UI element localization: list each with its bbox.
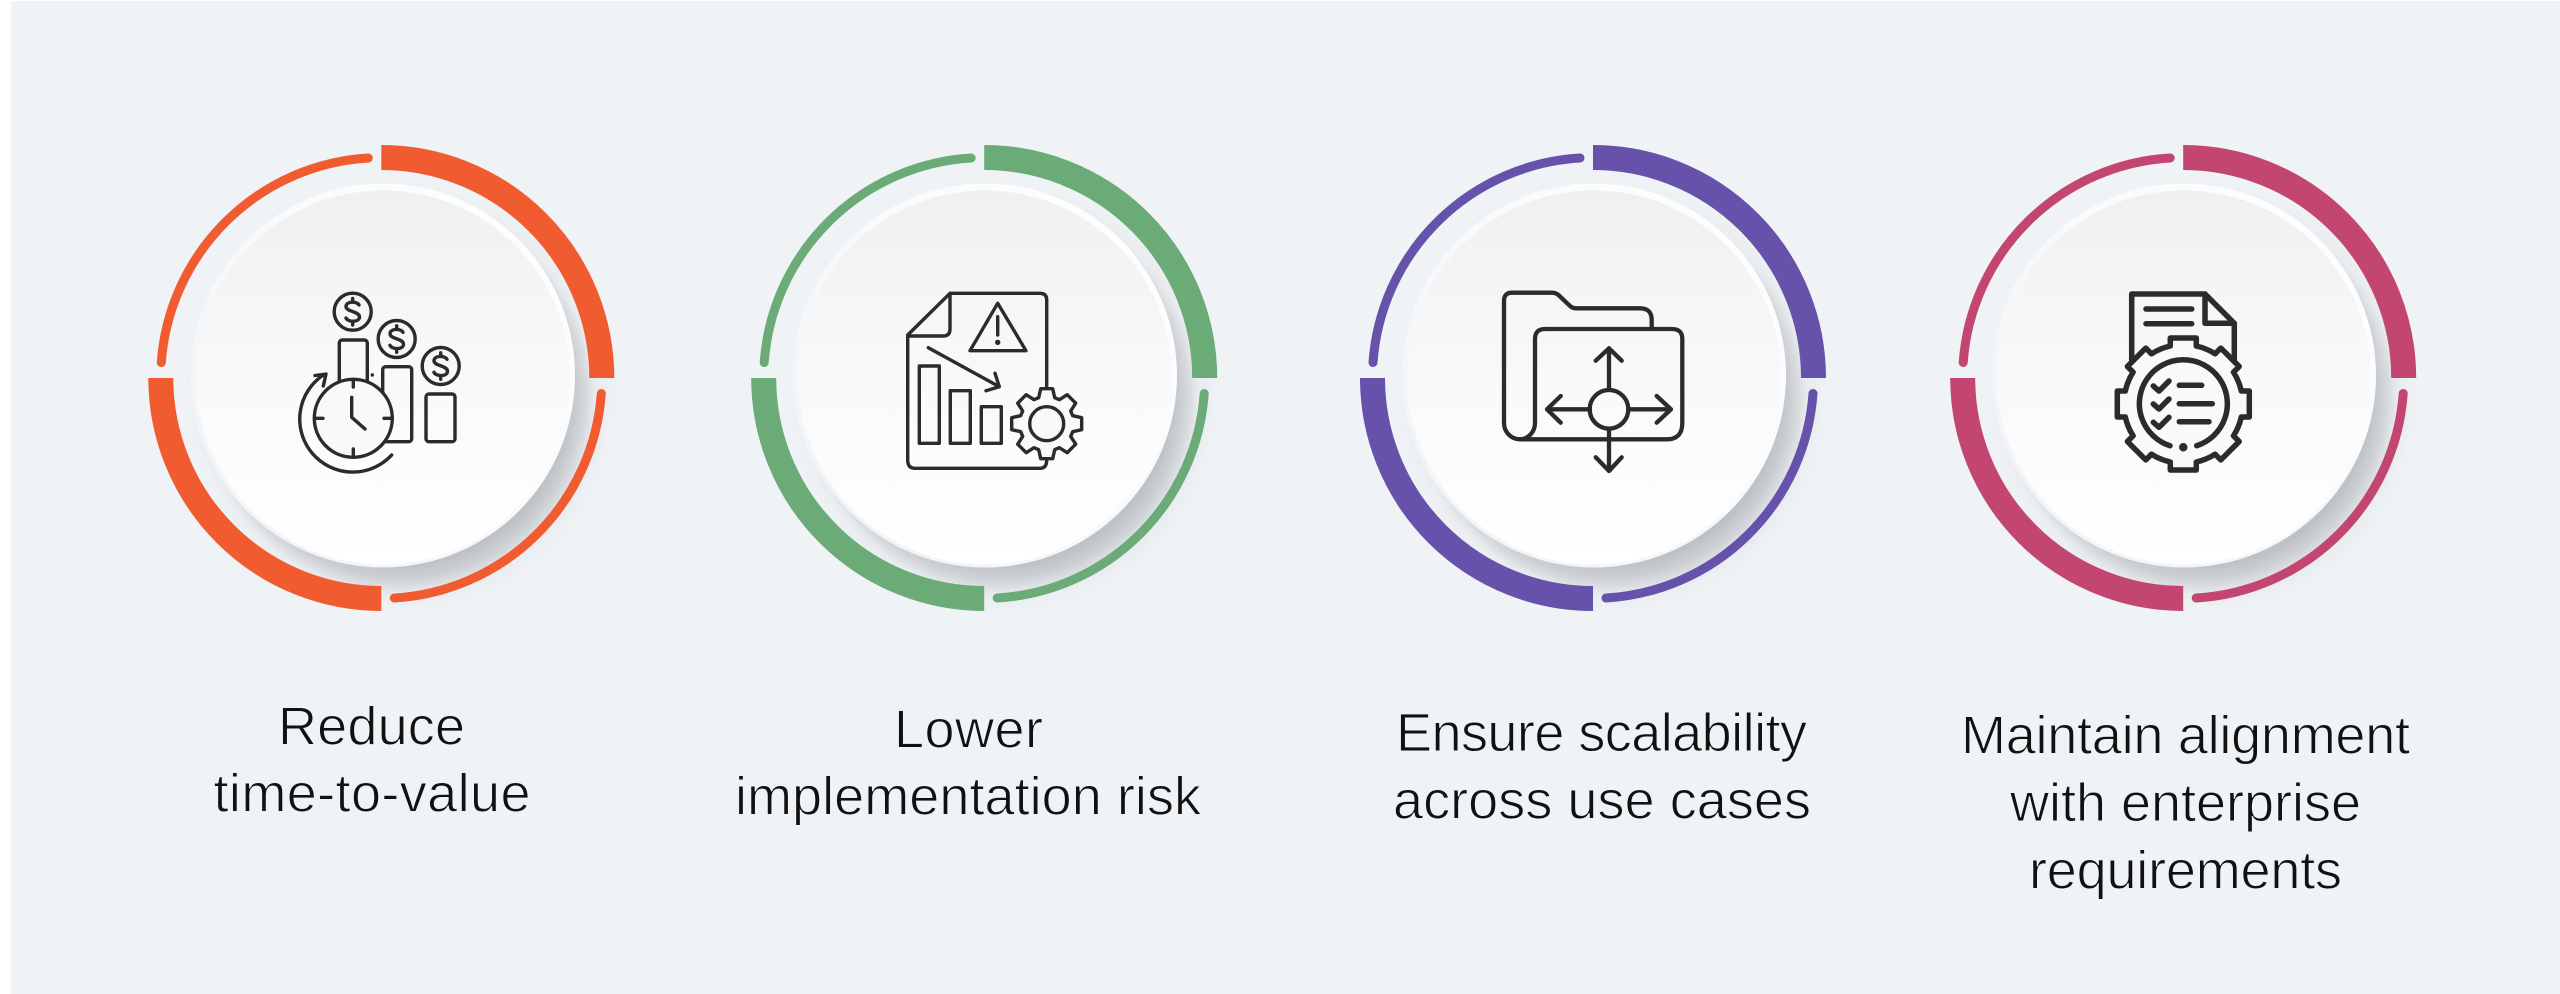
label: lower implementation risk: Lower: [894, 700, 1043, 760]
label: maintain alignment with enterprise requirements: [1961, 706, 2410, 900]
label: lower implementation risk: [735, 700, 1202, 826]
panel: ensure scalability: [1372, 158, 1817, 830]
ring disc: orange: [161, 158, 605, 602]
label: lower implementation risk: implementation risk: [735, 766, 1202, 826]
ring disc: purple: [1372, 158, 1817, 602]
label: maintain alignment with enterprise requirements: Maintain alignment: [1961, 706, 2410, 766]
label: reduce time-to-value: time-to-value: [214, 764, 530, 824]
icon: risk report with gear: [908, 293, 1082, 468]
ring disc: pink: [1963, 158, 2407, 602]
label: ensure scalability across use cases: Ensure scalability: [1396, 703, 1807, 763]
label: ensure scalability across use cases: [1393, 703, 1811, 830]
icon: clock with coins and bars: [300, 293, 459, 472]
icon: folder with expanding arrows: [1504, 293, 1682, 471]
ring disc: green: [764, 158, 1208, 602]
label: maintain alignment with enterprise requirements: requirements: [2029, 840, 2342, 900]
label: reduce time-to-value: Reduce: [278, 696, 465, 756]
panel: maintain alignment: [1961, 158, 2410, 900]
panel: reduce time-to-value: [161, 158, 605, 824]
icon: compliance document with gear: [2117, 294, 2249, 470]
panel: lower implementation risk: [735, 158, 1208, 826]
label: maintain alignment with enterprise requirements: with enterprise: [2009, 773, 2361, 833]
label: reduce time-to-value: [214, 696, 530, 824]
label: ensure scalability across use cases: across use cases: [1393, 770, 1811, 830]
